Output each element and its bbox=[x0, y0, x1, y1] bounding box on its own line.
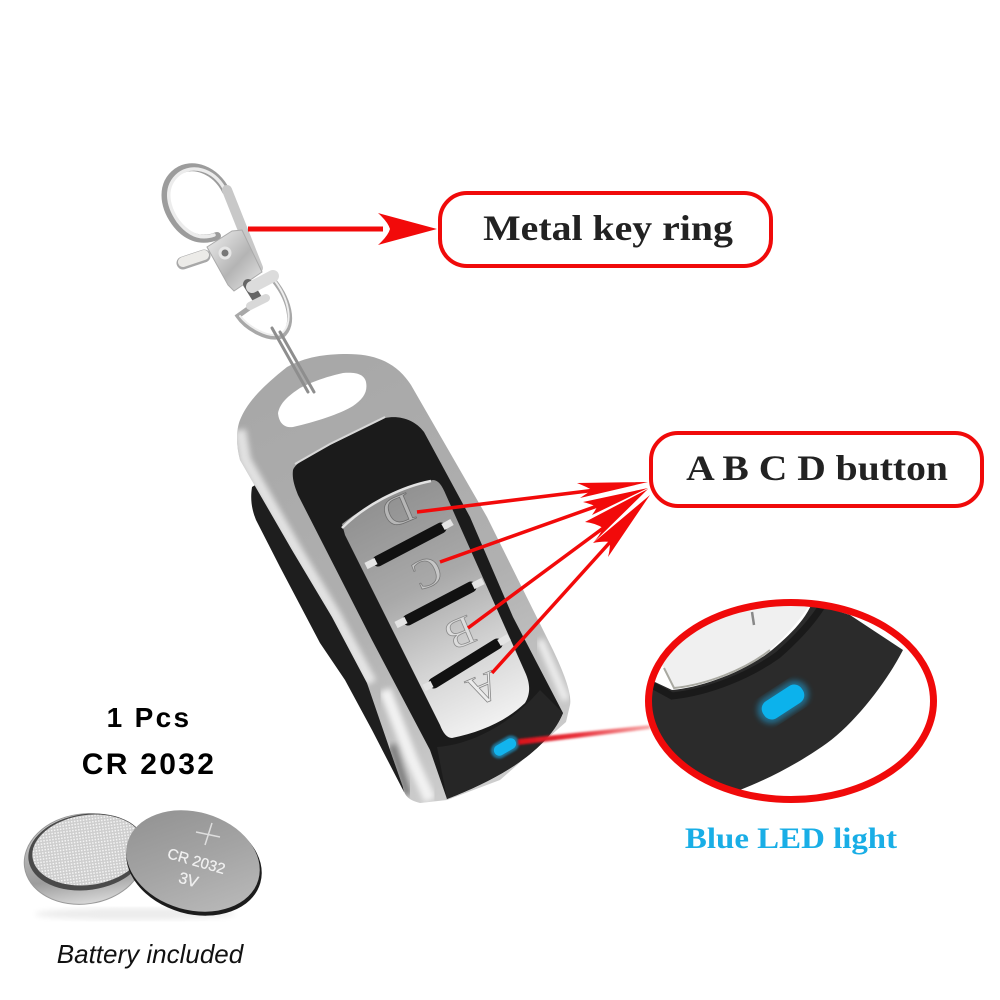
callout text: Metal key ring bbox=[483, 209, 733, 249]
arrow to B bbox=[468, 489, 648, 628]
fob black back shell bbox=[251, 470, 470, 792]
lens silver button bbox=[662, 606, 808, 687]
arrow A head bbox=[593, 495, 650, 557]
arrow A shaft bbox=[492, 540, 612, 673]
lens button rim bbox=[664, 650, 770, 688]
icon: coin batteries bbox=[18, 795, 274, 931]
icon: metal key ring clasp bbox=[166, 167, 290, 337]
arrow to A bbox=[492, 495, 650, 673]
blue LED on fob bbox=[488, 733, 522, 761]
clasp thumb tab face bbox=[183, 255, 204, 262]
separator D C ends bbox=[366, 522, 452, 566]
LED glow bbox=[488, 733, 522, 761]
icon: split ring bbox=[272, 328, 314, 392]
separator D C bbox=[378, 528, 441, 561]
LED core bbox=[492, 736, 518, 758]
arrow head bbox=[378, 213, 437, 245]
label: battery included: Battery included bbox=[57, 939, 245, 969]
lens LED core bbox=[758, 681, 808, 723]
icon: key fob bbox=[237, 354, 570, 803]
arrow C shaft bbox=[440, 505, 600, 562]
separator B A bbox=[434, 644, 497, 683]
right battery face bbox=[114, 795, 272, 927]
callout: metal key ring bbox=[440, 193, 771, 266]
separator C B bbox=[408, 587, 471, 620]
left battery rim bbox=[23, 806, 151, 898]
swivel D ring highlight bbox=[240, 277, 289, 335]
button plate bbox=[342, 480, 529, 738]
right battery edge bbox=[114, 797, 274, 931]
shadow bbox=[35, 908, 235, 920]
face top highlight bbox=[295, 417, 385, 464]
arrow B head bbox=[585, 489, 648, 543]
separator B A ends bbox=[424, 637, 509, 688]
fob chrome shading bbox=[240, 430, 566, 800]
arrow B shaft bbox=[468, 526, 606, 628]
label: Blue LED light: Blue LED light bbox=[685, 822, 898, 855]
lens red ring bbox=[648, 602, 934, 800]
battery voltage print: 3V bbox=[176, 870, 200, 892]
label: battery quantity: 1 Pcs bbox=[107, 702, 191, 733]
clasp body bbox=[207, 230, 262, 291]
battery model print: CR 2032 bbox=[165, 845, 227, 878]
swivel neck bbox=[248, 284, 258, 300]
battery plus mark bbox=[196, 823, 220, 845]
arrow D shaft bbox=[417, 490, 596, 512]
button plate rim bbox=[342, 481, 431, 528]
fob key ring hole bbox=[278, 373, 366, 427]
arrow to D bbox=[417, 482, 648, 512]
fob lower chrome light band bbox=[385, 690, 430, 800]
button letter D: D bbox=[375, 483, 421, 537]
arrow to C bbox=[440, 488, 648, 562]
button letter A: A bbox=[459, 661, 506, 715]
left battery edge bbox=[18, 806, 150, 912]
callout box bbox=[651, 433, 982, 506]
button letter C: C bbox=[405, 545, 449, 599]
swivel D ring bbox=[238, 276, 290, 337]
arrow: key ring bbox=[248, 213, 437, 245]
callout box bbox=[440, 193, 771, 266]
lens darker bezel bbox=[650, 606, 822, 696]
face lower panel bbox=[437, 690, 563, 799]
swivel nut bbox=[250, 298, 266, 306]
clasp gate arm bbox=[227, 190, 258, 268]
clasp loop bbox=[166, 167, 226, 239]
fob silver body bbox=[237, 354, 570, 803]
fob black face bbox=[293, 417, 563, 799]
lens dark casing bbox=[652, 607, 903, 790]
arrow shaft bbox=[248, 226, 383, 232]
button letter B: B bbox=[438, 605, 482, 659]
swivel collar bbox=[252, 276, 273, 287]
lens LED glow bbox=[752, 675, 814, 729]
clasp screw bbox=[220, 248, 230, 258]
clasp thumb tab bbox=[183, 256, 204, 263]
arrow: LED pointer line bbox=[518, 725, 650, 745]
lens background bbox=[648, 602, 934, 800]
lens letter fragment bbox=[752, 612, 754, 625]
arrow D head bbox=[577, 482, 648, 498]
fob left edge highlight bbox=[240, 430, 371, 683]
label: battery model: CR 2032 bbox=[82, 748, 216, 781]
left battery mesh face bbox=[28, 808, 148, 892]
arrow C head bbox=[583, 488, 648, 515]
callout: A B C D button bbox=[651, 433, 982, 506]
arrows: A B C D buttons bbox=[417, 482, 650, 673]
fob right chrome glint bbox=[540, 640, 566, 700]
fob lower chrome shade bbox=[392, 745, 408, 795]
clasp loop highlight bbox=[169, 169, 224, 237]
button separators bbox=[366, 522, 509, 688]
magnified LED lens bbox=[640, 590, 934, 800]
lens content bbox=[652, 606, 903, 790]
callout text: A B C D button bbox=[686, 449, 948, 489]
separator C B ends bbox=[396, 581, 483, 625]
